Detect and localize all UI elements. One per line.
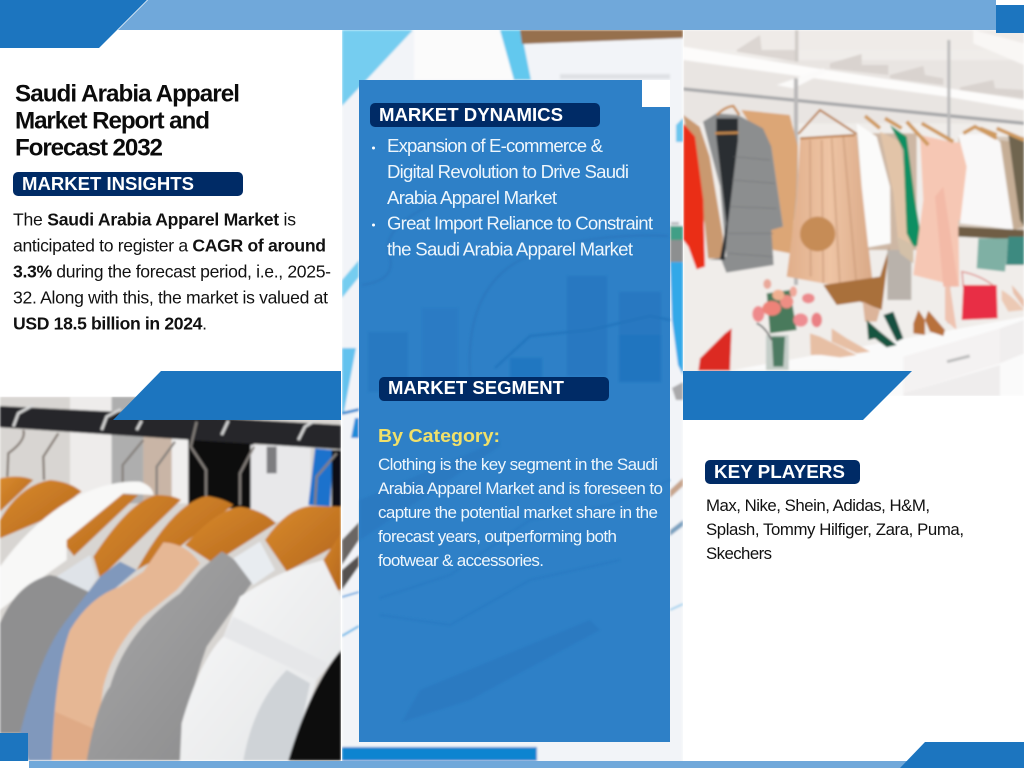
title: Market Report and [15,108,210,134]
right photo: clothing rack in a wardrobe [683,30,1024,396]
faint chart inside panel [360,205,670,722]
center background photo: charts and pen [342,30,683,768]
text block: market segment: forecast years, outperforming both [378,527,617,546]
text block: market dynamics bullets: Digital Revolution to Drive Saudi [387,161,629,182]
wooden hangers [0,477,341,591]
top right blue square [996,5,1024,33]
bottom light blue bar [29,761,909,768]
white hoodie [180,560,341,761]
heading: market insights [13,172,243,196]
panel: blue center column [359,80,670,742]
gray hoodie [87,552,252,761]
pleated dress [787,135,873,288]
heading: market segment: MARKET SEGMENT [388,377,565,398]
text block: market dynamics bullets: the Saudi Arabia Apparel Market [387,238,634,260]
text block: key players [706,496,964,563]
white blouse [857,123,891,247]
heading: market insights: MARKET INSIGHTS [22,173,194,194]
left garments [683,115,723,258]
text block: market dynamics bullets: Arabia Apparel Market [387,187,558,208]
right photo banner [683,371,912,420]
text block: market insights: anticipated to register a CAGR of around [13,236,326,256]
blue hoodie [20,562,137,761]
white fluffy hoodie [0,482,153,610]
text block: key players: Skechers [706,544,772,563]
heading: key players: KEY PLAYERS [714,461,845,482]
title [15,80,240,162]
top light blue bar [118,0,996,30]
bottom left blue square [0,733,28,761]
red handbag [962,272,995,287]
right garments [958,133,1013,230]
hanger hooks [7,430,58,480]
flowers, vase and shoes [752,279,945,370]
heading: market segment [379,377,609,401]
text block: market dynamics bullets: Great Import Reliance to Constraint [387,212,654,234]
text block: market insights: The Saudi Arabia Apparel Market is [13,210,296,230]
clothes rail [0,406,341,449]
left photo banner [113,371,341,420]
title: Forecast 2032 [15,134,163,162]
bottom right dark blue corner [900,742,1024,768]
left photo: hoodies on wooden hangers [0,397,341,761]
pink dress [913,135,973,287]
counter [730,317,1024,396]
heading: market dynamics: MARKET DYNAMICS [379,104,563,125]
text block: market dynamics bullets: Expansion of E-commerce & [387,135,604,156]
text block: market insights: 3.3% during the forecast period, i.e., 2025- [13,262,331,282]
peach hoodie [52,542,200,761]
top left dark blue corner [0,0,147,48]
black garment [288,650,341,761]
gray hoodie left [0,575,90,733]
text block: key players: Max, Nike, Shein, Adidas, H&M, [706,496,930,515]
text block: market dynamics bullets [372,135,654,260]
shadow behind hanging clothes [857,133,917,250]
text block: market insights: 32. Along with this, the market is valued at [13,288,328,308]
white notch on panel [642,80,670,107]
text block: market segment: Arabia Apparel Market and is foreseen to [378,479,663,498]
text block: market segment [378,455,663,570]
text block: market segment: footwear & accessories. [378,551,544,570]
text block: market segment: capture the potential market share in the [378,503,658,522]
text block: market insights [13,210,331,334]
text block: key players: Splash, Tommy Hilfiger, Zara, Puma, [706,520,964,539]
small red bag [698,328,732,371]
text block: market insights: USD 18.5 billion in 2024. [13,314,207,334]
heading: market dynamics [370,103,600,127]
text block: market segment: Clothing is the key segment in the Saudi [378,455,658,474]
title: Saudi Arabia Apparel [15,80,240,108]
subheading: by category: By Category: [378,426,500,446]
